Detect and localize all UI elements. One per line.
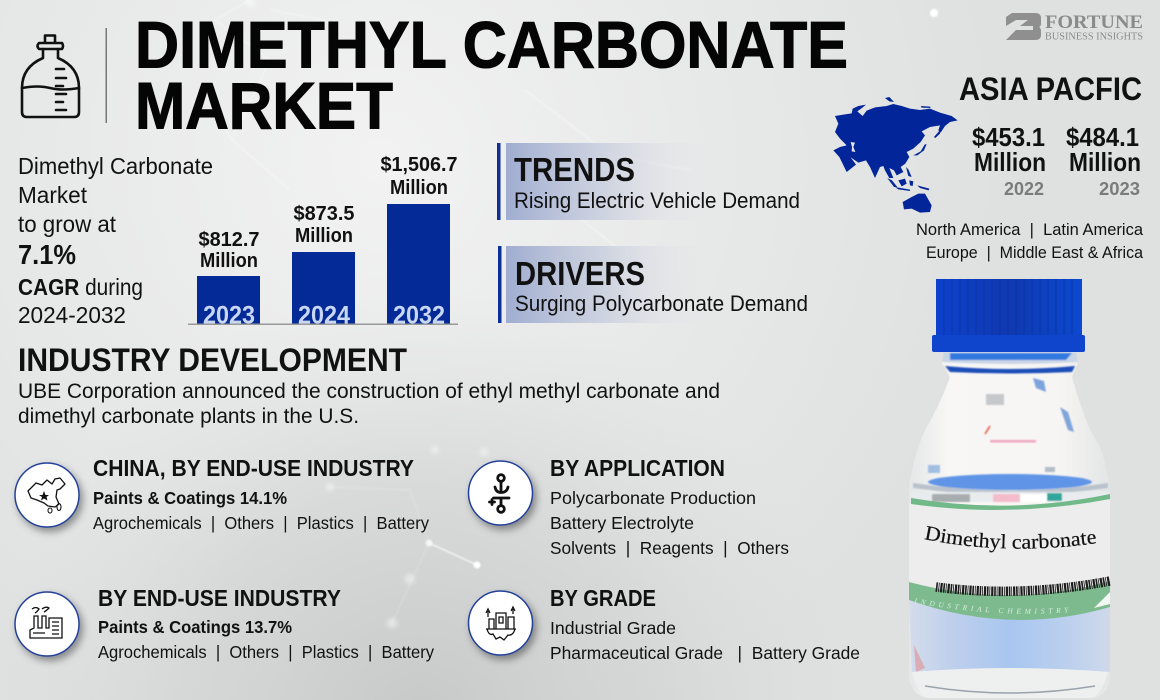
label — [909, 500, 1110, 597]
icon: flask — [22, 36, 79, 117]
market values: $484.1 — [1066, 122, 1139, 152]
panel: asia pacific: ASIA PACFIC — [959, 71, 1142, 107]
icon: factory — [15, 592, 79, 656]
CAGR text block: Dimethyl Carbonate — [18, 153, 213, 179]
industry development — [18, 342, 720, 428]
bar chart: 2024 — [298, 302, 350, 330]
panel: china by end-use: CHINA, BY END-USE INDUSTRY — [93, 455, 414, 481]
panel: asia pacific — [833, 71, 1142, 213]
bar chart: $812.7 — [198, 229, 260, 251]
panel: trends — [497, 143, 800, 220]
logo — [1006, 12, 1143, 42]
panel: trends: TRENDS — [514, 151, 635, 188]
bar chart: 2023 — [203, 302, 255, 330]
market values — [972, 122, 1141, 199]
title: MARKET — [135, 68, 393, 142]
panel: trends: Rising Electric Vehicle Demand — [514, 188, 800, 213]
bar chart: Million — [390, 177, 448, 199]
panel: by end-use industry: Paints & Coatings 13.7% — [98, 617, 292, 637]
market values: 2023 — [1099, 179, 1140, 199]
market values: 2022 — [1004, 179, 1044, 199]
icon: application — [468, 461, 532, 525]
panel: by application: Polycarbonate Production — [550, 488, 756, 508]
panel: drivers: Surging Polycarbonate Demand — [515, 291, 808, 316]
panel: by end-use industry: BY END-USE INDUSTRY — [98, 585, 341, 611]
market values: Million — [1069, 147, 1141, 177]
bar chart: Million — [200, 250, 258, 272]
icon: china map — [15, 463, 79, 527]
CAGR text block: to grow at — [18, 211, 117, 237]
bottle glass — [909, 352, 1110, 698]
CAGR text block: 7.1% — [18, 239, 76, 270]
panel: china by end-use — [15, 455, 429, 533]
logo: FORTUNE — [1045, 12, 1143, 33]
other regions: North America | Latin America — [916, 220, 1144, 239]
bottle cap — [932, 279, 1085, 352]
bar chart: $873.5 — [294, 203, 354, 225]
panel: by grade — [468, 585, 860, 663]
bottle liquid — [909, 600, 1110, 672]
panel: by end-use industry — [15, 585, 434, 662]
market values: $453.1 — [972, 122, 1045, 152]
bar chart: Million — [295, 225, 353, 247]
panel: by application: Battery Electrolyte — [550, 513, 694, 533]
logo: BUSINESS INSIGHTS — [1045, 32, 1143, 42]
bar chart — [188, 154, 458, 330]
panel: by grade: BY GRADE — [550, 585, 656, 611]
panel: by application: BY APPLICATION — [550, 455, 725, 481]
divider — [106, 28, 107, 123]
CAGR text block: CAGR during — [18, 274, 143, 300]
icon: grade gear — [468, 591, 532, 655]
panel: by grade: Pharmaceutical Grade | Battery Grade — [550, 643, 860, 663]
CAGR text block — [18, 153, 213, 328]
panel: by grade: Industrial Grade — [550, 618, 676, 638]
panel: china by end-use: Agrochemicals | Others | Plastics | Battery — [93, 513, 429, 533]
icon: asia pacific map — [833, 97, 958, 213]
market values: Million — [974, 147, 1046, 177]
bar chart: 2032 — [393, 302, 445, 330]
other regions — [916, 220, 1144, 262]
barcode — [936, 581, 1110, 591]
CAGR text block: 2024-2032 — [18, 302, 126, 328]
bar chart: $1,506.7 — [380, 154, 458, 176]
bottle: INDUSTRIAL CHEMISTRY — [914, 598, 1069, 614]
other regions: Europe | Middle East & Africa — [926, 243, 1144, 262]
industry development: UBE Corporation announced the construction of ethyl methyl carbonate and — [18, 380, 720, 403]
panel: drivers — [498, 246, 808, 323]
panel: by application: Solvents | Reagents | Others — [550, 538, 789, 558]
panel: china by end-use: Paints & Coatings 14.1% — [93, 488, 287, 508]
industry development: INDUSTRY DEVELOPMENT — [18, 342, 407, 378]
CAGR text block: Market — [18, 182, 88, 208]
bottle — [909, 279, 1110, 698]
bottle: Dimethyl carbonate — [924, 526, 1096, 552]
title — [135, 8, 848, 142]
industry development: dimethyl carbonate plants in the U.S. — [18, 405, 359, 428]
panel: by application — [468, 455, 789, 558]
panel: drivers: DRIVERS — [515, 255, 645, 292]
title: DIMETHYL CARBONATE — [135, 8, 848, 82]
panel: by end-use industry: Agrochemicals | Others | Plastics | Battery — [98, 642, 434, 662]
